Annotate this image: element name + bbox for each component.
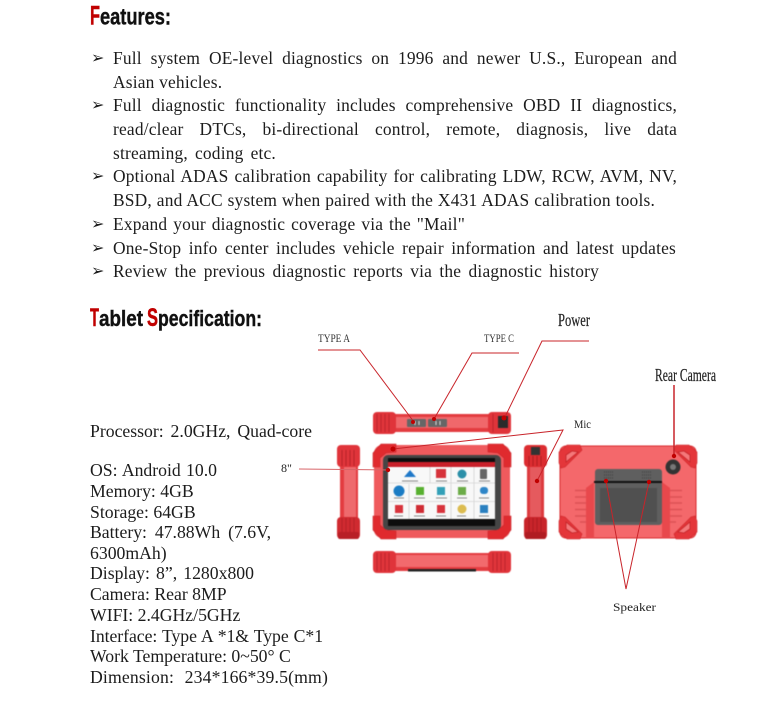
callout lines and dots (299, 341, 676, 589)
feature 1 line 1: Full system OE-level diagnostics on 1996 and newer U.S., European and (113, 48, 677, 68)
spec: wifi: WIFI: 2.4GHz/5GHz (90, 605, 240, 625)
app icons (394, 469, 490, 516)
bullet 5: ➢ (91, 238, 104, 257)
spec: interface: Interface: Type A *1& Type C*1 (90, 626, 323, 646)
label: Speaker: Speaker (613, 600, 656, 614)
specification list (90, 421, 328, 687)
feature 3 line 1: Optional ADAS calibration capability for calibrating LDW, RCW, AVM, NV, (113, 166, 677, 186)
heading: Tablet Specification (90, 305, 262, 332)
feature 2 line 1: Full diagnostic functionality includes comprehensive OBD II diagnostics, (113, 95, 677, 115)
spec: dimension: Dimension: 234*166*39.5(mm) (90, 667, 328, 687)
label: TYPE A: TYPE A (318, 331, 350, 345)
top view of tablet (373, 412, 511, 434)
heading: Tablet Specification: ablet (99, 306, 144, 331)
spec: OS: OS: Android 10.0 (90, 460, 217, 480)
spec: work temperature: Work Temperature: 0~50° C (90, 646, 291, 666)
bottom view of tablet (373, 551, 511, 573)
feature 4: Expand your diagnostic coverage via the "Mail" (113, 214, 465, 234)
spec: battery: Battery: 47.88Wh (7.6V, (90, 522, 271, 542)
label: Power: Power (558, 310, 590, 330)
spec: battery capacity: 6300mAh) (90, 543, 167, 563)
bullet 6: ➢ (91, 261, 104, 280)
spec: memory: Memory: 4GB (90, 481, 194, 501)
feature 3 line 2: BSD, and ACC system when paired with the X431 ADAS calibration tools. (113, 190, 655, 210)
front view of tablet (373, 444, 511, 539)
spec: camera: Camera: Rear 8MP (90, 584, 227, 604)
rear view of tablet (559, 445, 697, 539)
feature 6: Review the previous diagnostic reports via the diagnostic history (113, 261, 599, 281)
spec: storage: Storage: 64GB (90, 502, 196, 522)
heading: Features: F (90, 0, 100, 30)
spec: display: Display: 8”, 1280x800 (90, 563, 254, 583)
feature 2 line 3: streaming, coding etc. (113, 143, 276, 163)
label: 8 inch: 8" (281, 461, 292, 475)
heading: Features (90, 0, 171, 30)
bullet 1: ➢ (91, 48, 104, 67)
label: TYPE C: TYPE C (484, 331, 514, 345)
left side view of tablet (337, 445, 360, 539)
heading: Features: eatures: (100, 4, 171, 30)
bullet 4: ➢ (91, 214, 104, 233)
feature 2 line 2: read/clear DTCs, bi-directional control, remote, diagnosis, live data (113, 119, 677, 139)
feature 1 line 2: Asian vehicles. (113, 72, 222, 92)
bullet 2: ➢ (91, 95, 104, 114)
feature 5: One-Stop info center includes vehicle repair information and latest updates (113, 238, 676, 258)
spec: processor: Processor: 2.0GHz, Quad-core (90, 421, 312, 441)
label: Rear Camera: Rear Camera (655, 365, 716, 385)
feature list (91, 48, 677, 281)
right side view of tablet (524, 445, 547, 539)
label: Mic: Mic (574, 417, 591, 431)
bullet 3: ➢ (91, 166, 104, 185)
heading: Tablet Specification: pecification: (158, 306, 262, 331)
